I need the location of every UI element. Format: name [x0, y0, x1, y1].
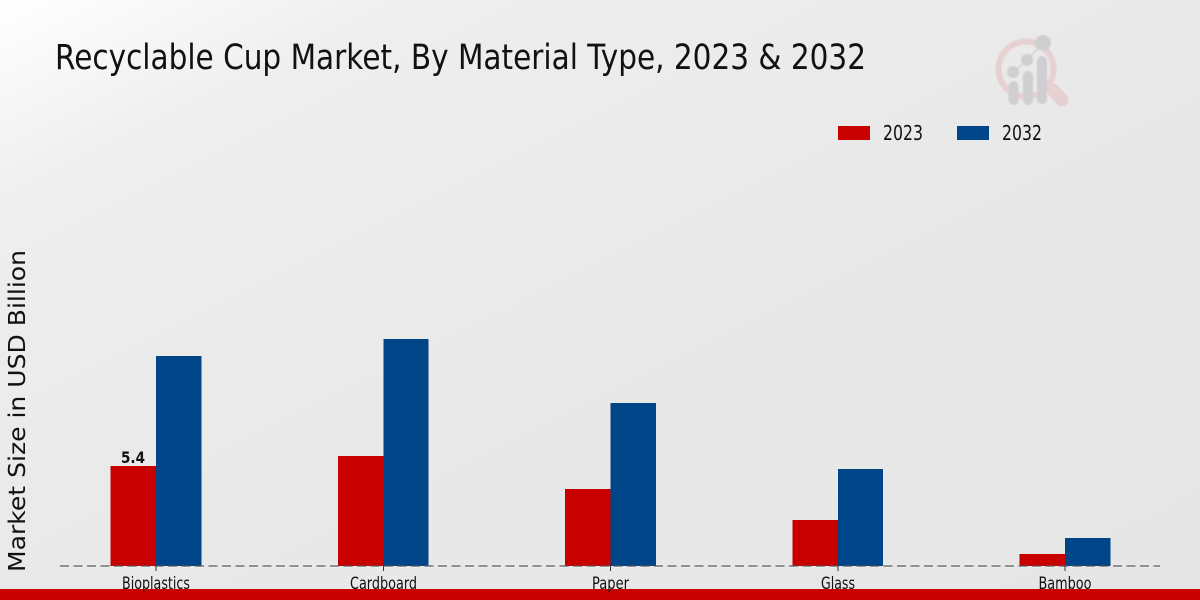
bottom band — [0, 589, 1200, 600]
bar chart — [60, 339, 1160, 571]
legend item: 2023: 2023 — [883, 121, 923, 145]
bars: Cardboard — [338, 339, 428, 566]
icon: watermark logo — [998, 35, 1062, 105]
label: Bioplastics: Bioplastics — [122, 574, 190, 593]
x-axis labels — [122, 574, 1092, 593]
legend item: 2032 — [957, 121, 1042, 145]
legend — [838, 121, 1042, 145]
title: Recyclable Cup Market, By Material Type, 2023 & 2032 — [55, 38, 866, 78]
data label: 5.4: 5.4 — [121, 448, 145, 467]
bars: Bamboo — [1020, 538, 1110, 566]
label: Bamboo: Bamboo — [1038, 574, 1092, 593]
label: Paper: Paper — [592, 574, 629, 593]
y-axis label: Market Size in USD Billion — [3, 250, 31, 572]
legend item: 2032: 2032 — [1002, 121, 1042, 145]
bars: Glass — [792, 469, 883, 566]
bars: Bioplastics — [110, 356, 202, 566]
legend item: 2023 — [838, 121, 923, 145]
label: Glass: Glass — [821, 574, 855, 593]
bars: Paper — [565, 403, 656, 566]
label: Cardboard: Cardboard — [350, 574, 417, 593]
